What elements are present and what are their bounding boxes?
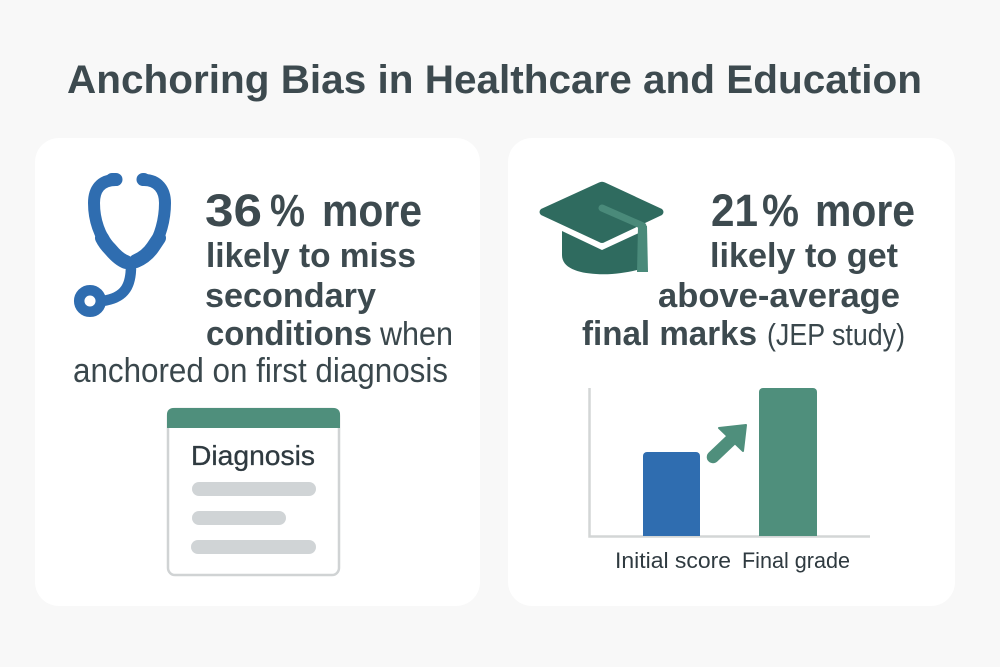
bar: final grade	[759, 388, 817, 536]
icon: stethoscope	[79, 180, 165, 312]
bar: initial score	[643, 452, 700, 536]
text: conditions: conditions	[206, 315, 372, 353]
panel: healthcare	[35, 138, 480, 606]
text: anchored on first diagnosis: anchored on first diagnosis	[73, 352, 448, 390]
card lines	[191, 482, 316, 554]
text: likely to miss: likely to miss	[206, 237, 416, 275]
bar chart	[590, 388, 870, 573]
stat: 21% more: more	[815, 185, 915, 236]
text: when: when	[379, 315, 453, 352]
card header	[167, 408, 340, 428]
stat: 36% more: %	[270, 185, 305, 236]
label: final grade: Final grade	[742, 548, 850, 573]
icon: graduation cap	[540, 182, 664, 274]
text: above-average: above-average	[658, 277, 900, 315]
arrow	[713, 425, 746, 457]
text: JEP study: (JEP study)	[767, 317, 905, 352]
diagnosis card	[167, 408, 340, 575]
text: likely to get: likely to get	[710, 237, 898, 275]
stat: 21% more: 21	[711, 185, 758, 236]
stat: 36% more	[205, 185, 422, 236]
text: final marks: final marks	[582, 315, 757, 353]
text: secondary: secondary	[205, 277, 376, 315]
stat: 21% more	[711, 185, 915, 236]
card heading: Diagnosis	[191, 440, 315, 471]
stat: 36% more: 36	[205, 185, 262, 236]
label: initial score: Initial score	[615, 548, 731, 573]
stat: 36% more: more	[322, 185, 422, 236]
title: Anchoring Bias in Healthcare and Education	[67, 58, 922, 102]
stat: 21% more: %	[762, 185, 799, 236]
panel: education	[508, 138, 955, 606]
